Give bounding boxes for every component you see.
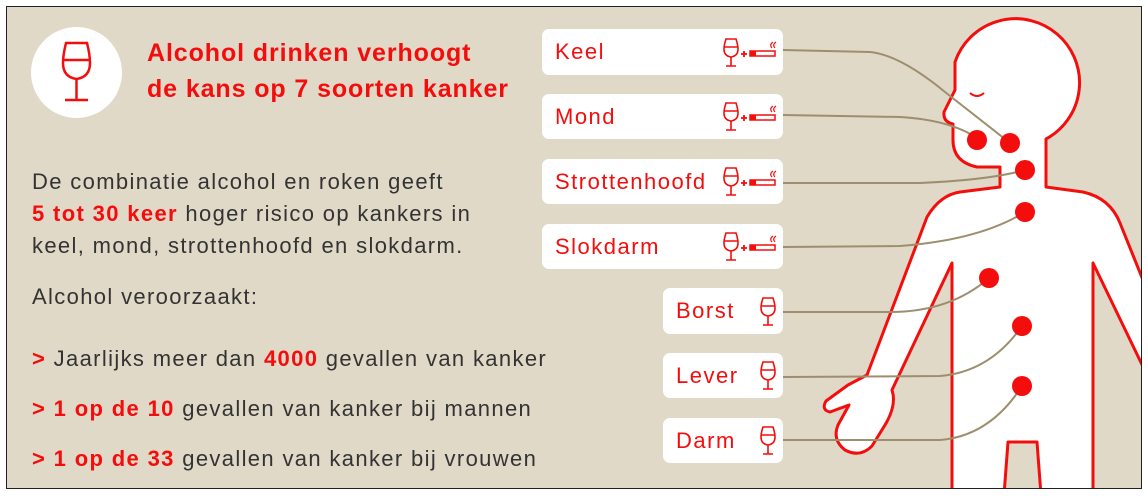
text block: combinatie: 5 tot 30 keer hoger risico op kankers in — [32, 201, 471, 226]
title: Alcohol drinken verhoogt — [147, 39, 471, 67]
label: Mond — [542, 94, 783, 139]
bullet list — [32, 346, 547, 471]
text block: combinatie: keel, mond, strottenhoofd en slokdarm. — [32, 233, 464, 258]
label: Lever — [663, 353, 783, 398]
label: Mond: Mond — [555, 104, 616, 128]
label: Keel: Keel — [555, 39, 605, 64]
icon: wine glass in circle — [31, 27, 122, 118]
label: Borst — [663, 288, 783, 334]
text block: combinatie — [32, 169, 471, 258]
text: alcohol veroorzaakt: Alcohol veroorzaakt: — [32, 284, 258, 309]
body silhouette — [824, 19, 1147, 495]
label: Slokdarm — [542, 224, 783, 269]
cancer location dots — [967, 130, 1035, 396]
title — [147, 39, 509, 103]
eye — [970, 93, 984, 96]
label: Strottenhoofd: Strottenhoofd — [555, 168, 707, 194]
label: Keel — [542, 29, 783, 75]
label: Darm — [663, 418, 783, 463]
label: Slokdarm: Slokdarm — [555, 234, 660, 258]
connector lines — [783, 50, 1025, 440]
title: de kans op 7 soorten kanker — [147, 75, 509, 103]
bullet list: > 1 op de 33 gevallen van kanker bij vrouwen — [32, 446, 537, 471]
bullet list: > Jaarlijks meer dan 4000 gevallen van kanker — [32, 346, 547, 371]
label: Darm: Darm — [676, 428, 736, 452]
label: Strottenhoofd — [542, 159, 783, 204]
bullet list: > 1 op de 10 gevallen van kanker bij mannen — [32, 396, 532, 421]
body figure with connectors — [783, 17, 1141, 488]
label: Lever: Lever — [676, 362, 739, 388]
text block: combinatie: De combinatie alcohol en roken geeft — [32, 169, 444, 194]
label: Borst: Borst — [676, 298, 735, 323]
